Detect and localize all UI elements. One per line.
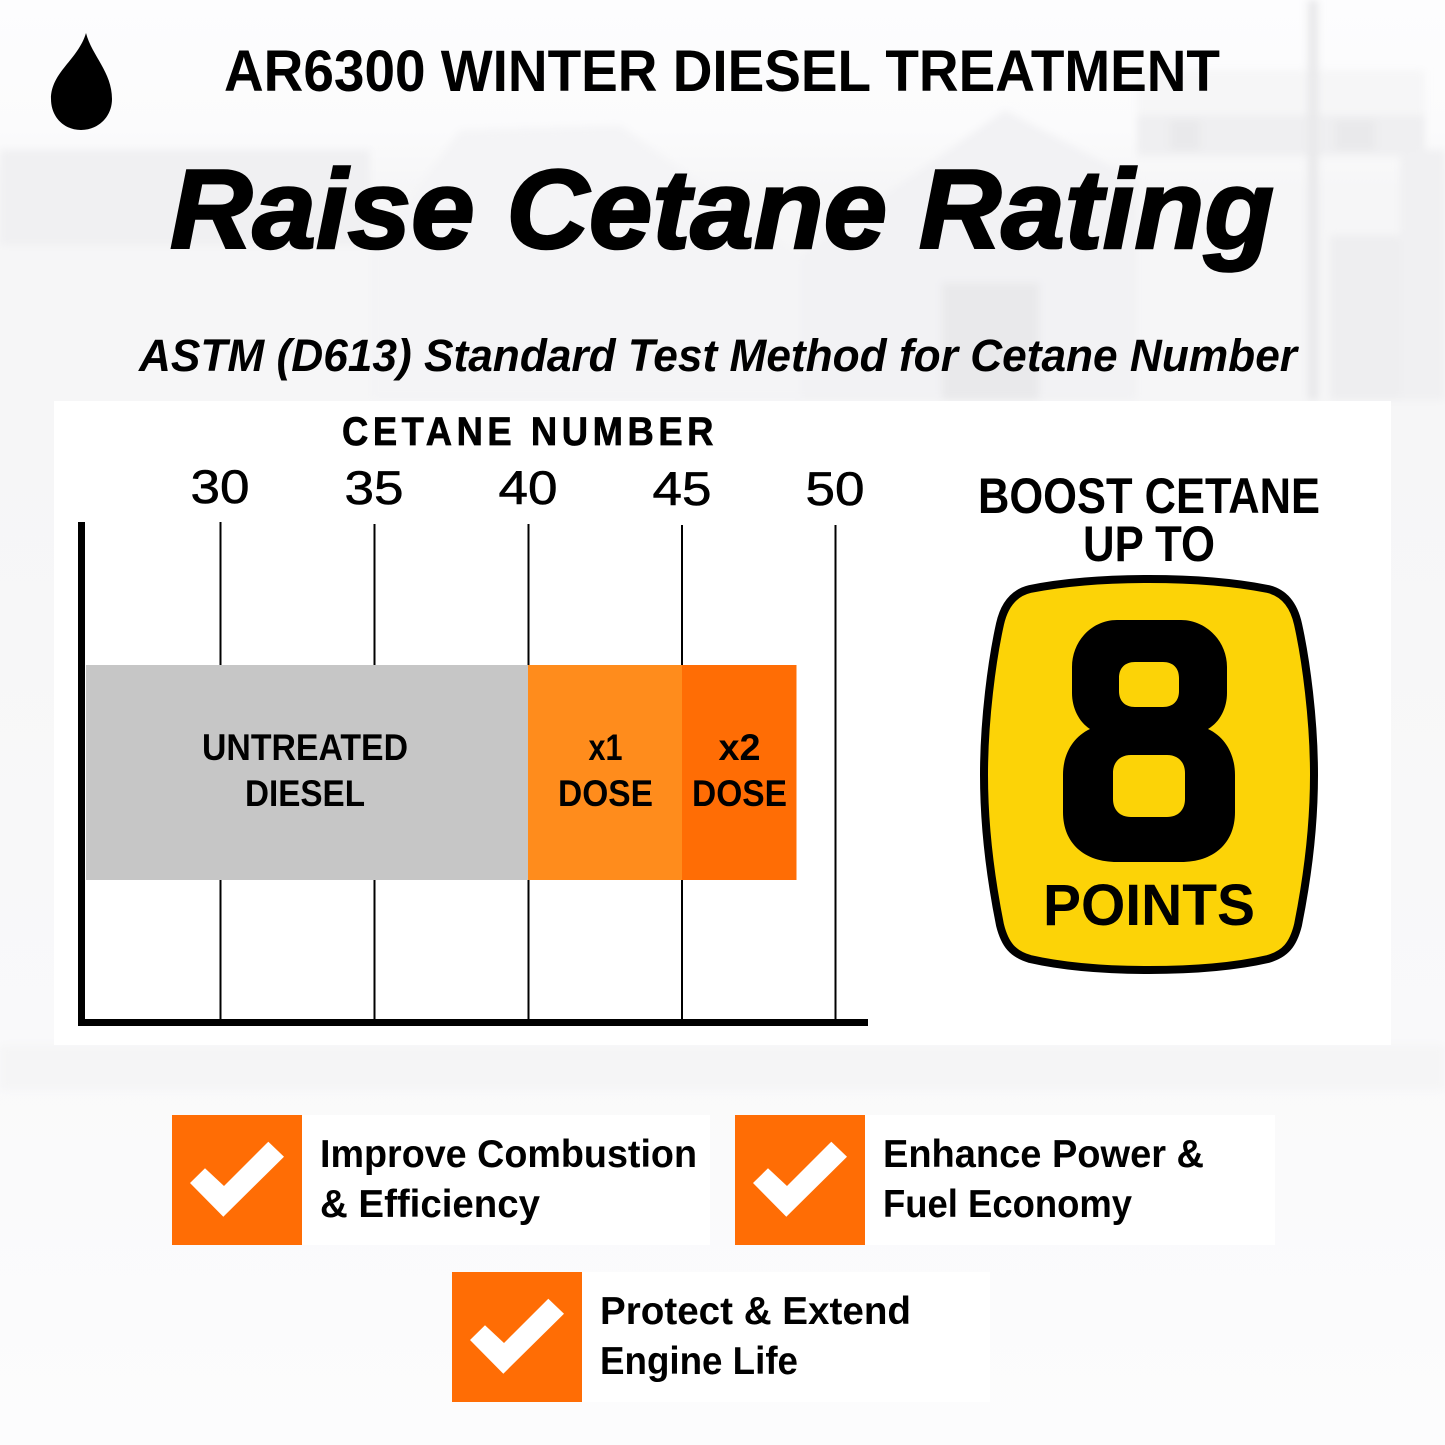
axis tick labels: 35 [344,461,404,514]
icon: check [452,1272,582,1402]
bar: x2 dose: x2 [718,727,760,768]
yellow shield [984,579,1314,970]
bar: x1 dose: DOSE [558,773,653,814]
axis tick labels: 40 [498,461,558,514]
heading: Raise Cetane Rating: Raise Cetane Rating [170,147,1274,272]
icon: check [735,1115,865,1245]
bar: untreated diesel [86,665,528,880]
icon: check [172,1115,302,1245]
badge heading: BOOST CETANE [978,468,1320,524]
badge: boost cetane 8 points [978,468,1320,970]
benefit: combustion and efficiency: Improve Combustion [320,1133,697,1176]
chart: cetane number bars [82,410,868,1022]
bar: untreated diesel: DIESEL [245,773,365,814]
bar: x1 dose [528,665,682,880]
title: product name: AR6300 WINTER DIESEL TREATMENT [224,39,1220,104]
axis tick labels: 45 [652,462,712,515]
benefit: power and fuel economy: Enhance Power & [883,1133,1204,1176]
bar: x1 dose: x1 [588,727,622,768]
axis tick labels: 30 [190,460,250,513]
panel: chart and badge [54,401,1391,1045]
points label: POINTS [1043,873,1255,938]
badge: boost cetane 8 points: UP TO [1083,516,1215,572]
subheading: test method: ASTM (D613) Standard Test Method for Cetane Number [138,330,1299,381]
axis title: CETANE NUMBER [342,410,718,454]
benefit: power and fuel economy: Fuel Economy [883,1183,1132,1226]
axis tick labels: 50 [806,462,864,515]
benefit: protect engine life: Engine Life [600,1340,798,1383]
benefit: protect engine life [452,1272,990,1402]
benefit: combustion and efficiency [172,1115,710,1245]
benefit: power and fuel economy [735,1115,1275,1245]
benefit: protect engine life: Protect & Extend [600,1290,911,1333]
axes [82,522,868,1022]
benefit: combustion and efficiency: & Efficiency [320,1183,540,1226]
big number 8 [1063,620,1235,862]
gridlines [220,522,836,1020]
bar: x2 dose: DOSE [692,773,787,814]
axis tick labels [190,460,864,515]
bar: untreated diesel: UNTREATED [202,727,408,768]
bar: x2 dose [682,665,796,880]
icon: oil drop [51,33,112,130]
